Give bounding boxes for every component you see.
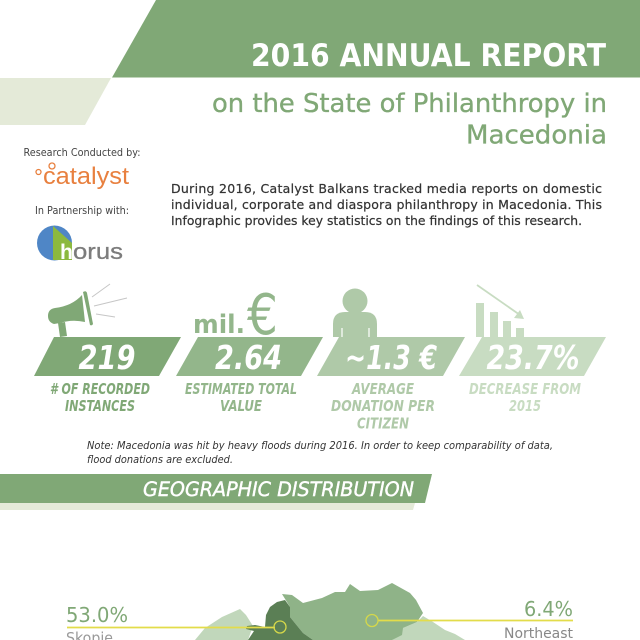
banner (317, 337, 465, 376)
intro paragraph (171, 181, 602, 228)
label: INSTANCES (65, 397, 135, 415)
label: AVERAGE (351, 380, 415, 398)
intro paragraph: individual, corporate and diaspora philanthropy in Macedonia. This (171, 197, 602, 212)
logo: horus: h (60, 241, 73, 264)
icon: mil euro: € (247, 283, 278, 348)
intro paragraph: Infographic provides key statistics on the findings of this research. (171, 213, 582, 228)
region: west (195, 609, 253, 640)
value: 219 (78, 338, 136, 377)
label (331, 380, 435, 432)
logo: horus: orus (73, 239, 123, 264)
callout: Skopje: 53.0% (66, 603, 128, 627)
label: DONATION PER (331, 397, 435, 415)
header banner (0, 0, 640, 125)
stat: average donation (317, 288, 465, 432)
region: northeast (282, 583, 423, 640)
title: 2016 ANNUAL REPORT (251, 38, 606, 74)
subtitle: Macedonia (466, 120, 607, 150)
icon: falling bars (476, 285, 524, 337)
subtitle: on the State of Philanthropy in (212, 89, 607, 119)
banner (34, 337, 181, 376)
logo: catalyst: catalyst (43, 163, 129, 190)
label (185, 380, 297, 415)
value: 23.7% (486, 338, 580, 377)
icon: mil euro: mil. (193, 310, 245, 340)
footnote: Note: Macedonia was hit by heavy floods during 2016. In order to keep comparability of data, (87, 440, 553, 452)
footnote (87, 440, 553, 466)
partnership label: In Partnership with: (35, 204, 129, 217)
section heading: geographic distribution: GEOGRAPHIC DISTRIBUTION (143, 478, 414, 501)
label: CITIZEN (357, 414, 409, 432)
label: 2015 (509, 397, 541, 415)
callout: Northeast (366, 597, 574, 640)
callout: Skopje (66, 603, 286, 640)
research credit label: Research Conducted by: (24, 146, 140, 159)
footnote: flood donations are excluded. (87, 454, 233, 466)
map of Macedonia (195, 583, 465, 640)
callout: Northeast: 6.4% (524, 597, 573, 621)
icon: person (333, 288, 377, 337)
stat: estimated total value (176, 283, 323, 415)
banner (459, 337, 606, 376)
banner (176, 337, 323, 376)
label: VALUE (220, 397, 263, 415)
logo: horus (37, 226, 123, 264)
section heading: geographic distribution (0, 474, 432, 510)
region: east (392, 616, 465, 640)
icon: megaphone (48, 284, 127, 337)
label (469, 380, 581, 415)
label: ESTIMATED TOTAL (185, 380, 297, 398)
label: DECREASE FROM (469, 380, 581, 398)
icon: mil euro (193, 283, 278, 348)
label (50, 380, 150, 415)
intro paragraph: During 2016, Catalyst Balkans tracked media reports on domestic (171, 181, 602, 196)
label: # OF RECORDED (50, 380, 150, 398)
stat: recorded instances (34, 284, 181, 415)
subtitle (212, 89, 607, 150)
value: ~1.3 € (345, 338, 437, 377)
region: skopje (246, 600, 313, 640)
value: 2.64 (215, 338, 282, 377)
stat: decrease from 2015 (459, 285, 606, 415)
